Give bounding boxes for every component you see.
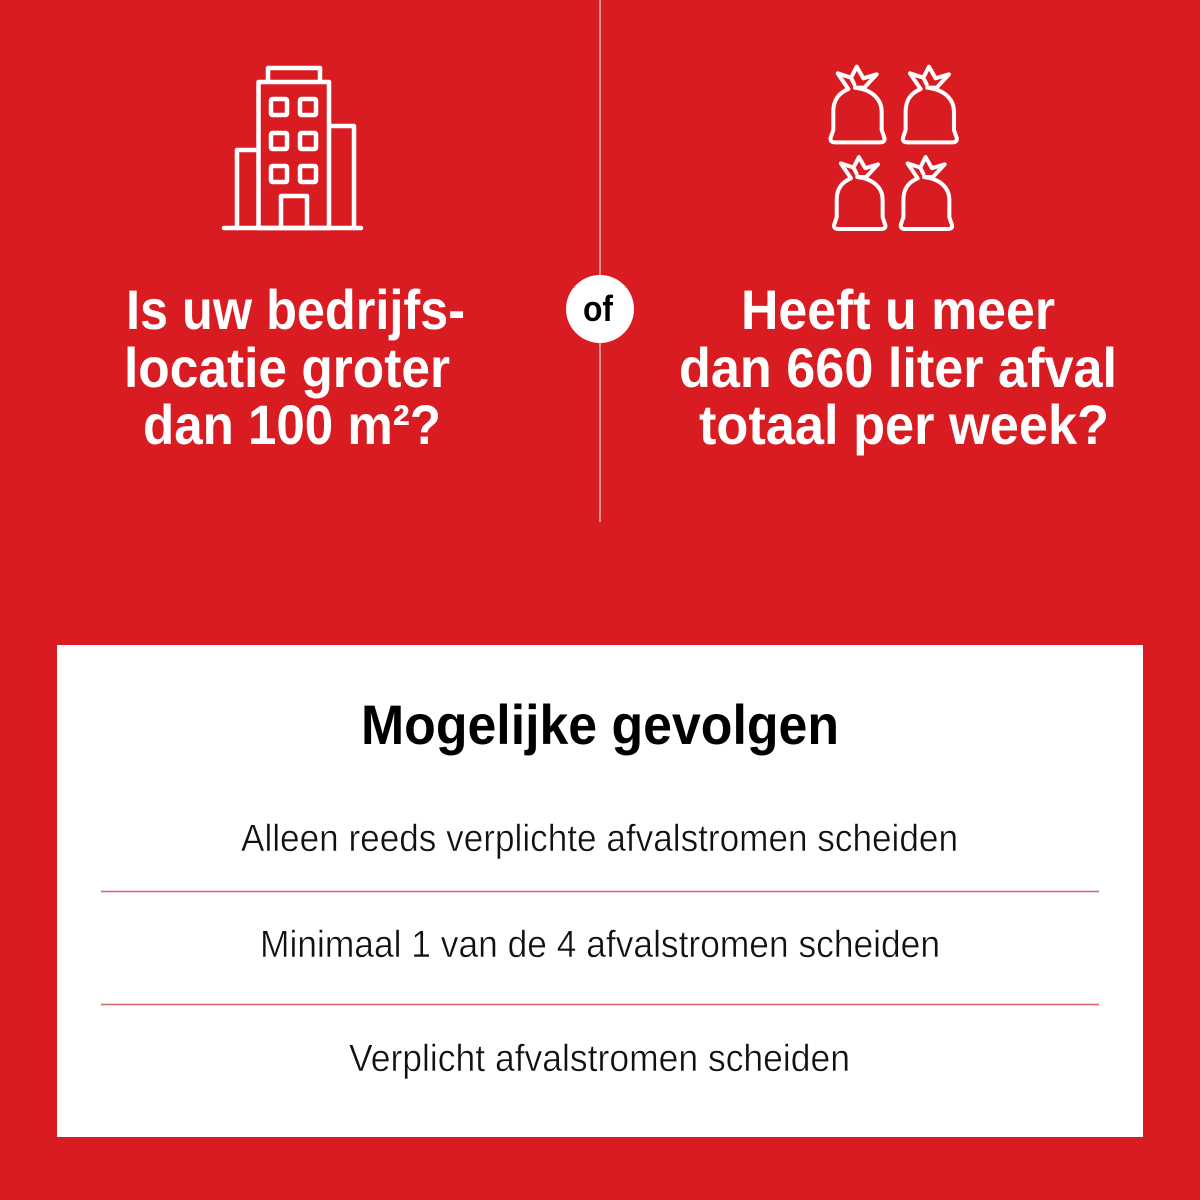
heading: building question: locatie groter xyxy=(124,336,450,399)
panel heading: Mogelijke gevolgen xyxy=(361,693,839,756)
consequence 1: Alleen reeds verplichte afvalstromen scheiden xyxy=(241,818,958,860)
consequence 3: Verplicht afvalstromen scheiden xyxy=(349,1038,850,1080)
badge: of xyxy=(566,275,634,343)
consequence 2: Minimaal 1 van de 4 afvalstromen scheiden xyxy=(260,924,940,966)
heading: waste question: Heeft u meer xyxy=(741,278,1055,341)
heading: waste question: dan 660 liter afval xyxy=(679,336,1117,399)
heading: building question xyxy=(124,278,465,456)
heading: waste question: totaal per week? xyxy=(699,393,1109,456)
heading: building question: Is uw bedrijfs- xyxy=(126,278,465,341)
heading: waste question xyxy=(679,278,1117,456)
icon: four waste bags xyxy=(831,67,957,229)
icon: office building xyxy=(224,68,361,228)
badge: of: of xyxy=(583,288,614,329)
panel: mogelijke gevolgen xyxy=(57,645,1143,1137)
heading: building question: dan 100 m²? xyxy=(143,393,441,456)
